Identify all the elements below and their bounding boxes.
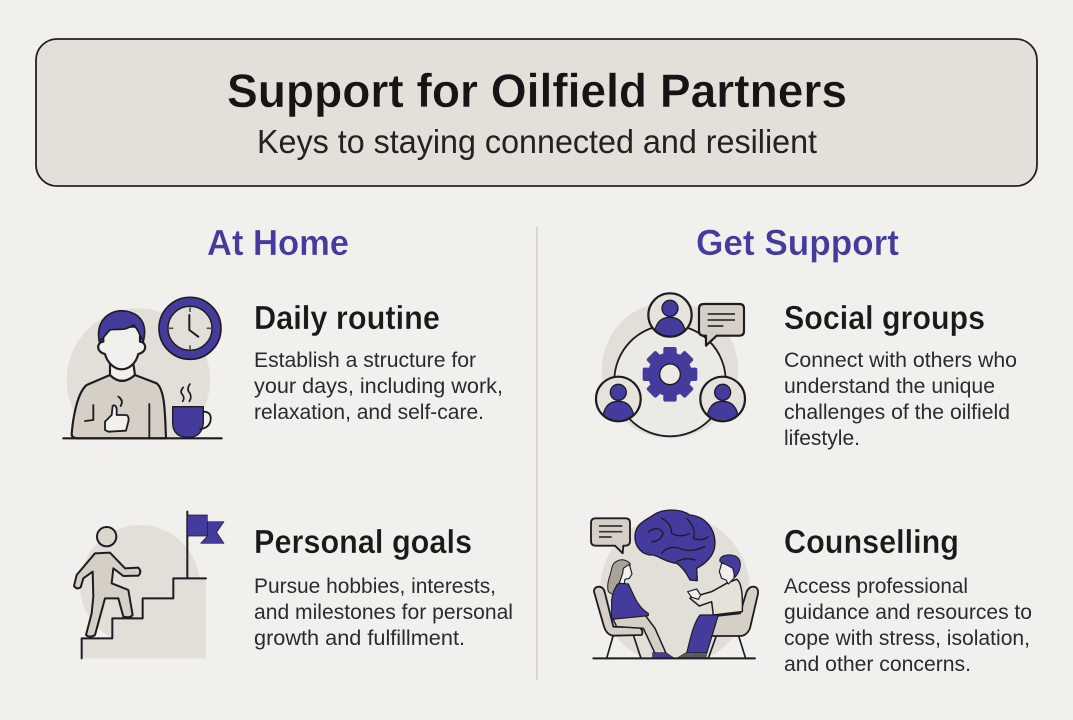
text: Personal goals description: and milestones for personal [254, 600, 513, 624]
text: Social groups description [784, 348, 1017, 450]
header banner [36, 39, 1037, 186]
item heading: Social groups: Social groups [784, 300, 985, 337]
text: Personal goals description [254, 574, 513, 650]
text: Counselling description: guidance and resources to [784, 600, 1032, 624]
text: Social groups description: Connect with others who [784, 348, 1017, 372]
title: Support for Oilfield Partners [227, 64, 847, 117]
item heading: Counselling: Counselling [784, 524, 959, 561]
text: Personal goals description: growth and fulfillment. [254, 626, 465, 650]
panel: Get Support [591, 222, 1032, 676]
heading: Get Support: Get Support [696, 222, 899, 263]
subtitle: Keys to staying connected and resilient [257, 123, 817, 160]
text: Daily routine description [254, 348, 503, 424]
icon: person climbing stairs to flag [74, 512, 224, 658]
item heading: Daily routine: Daily routine [254, 300, 440, 337]
icon: person with clock and coffee [63, 297, 222, 452]
woman in chair [594, 560, 674, 658]
text: Personal goals description: Pursue hobbies, interests, [254, 574, 496, 598]
text: Daily routine description: relaxation, and self-care. [254, 400, 484, 424]
text: Social groups description: challenges of the oilfield [784, 400, 1010, 424]
text: Counselling description: and other concerns. [784, 652, 971, 676]
text: Social groups description: lifestyle. [784, 426, 860, 450]
panel: At Home [63, 222, 513, 658]
icon: social group network with gear [596, 293, 745, 438]
text: Social groups description: understand the unique [784, 374, 995, 398]
text: Daily routine description: Establish a structure for [254, 348, 476, 372]
heading: At Home: At Home [207, 222, 349, 263]
man in chair [677, 555, 758, 658]
text: Daily routine description: your days, including work, [254, 374, 503, 398]
text: Counselling description [784, 574, 1032, 676]
text: Counselling description: Access professional [784, 574, 968, 598]
text: Counselling description: cope with stress, isolation, [784, 626, 1030, 650]
item heading: Personal goals: Personal goals [254, 524, 472, 561]
icon: counselling session with brain [591, 510, 758, 665]
